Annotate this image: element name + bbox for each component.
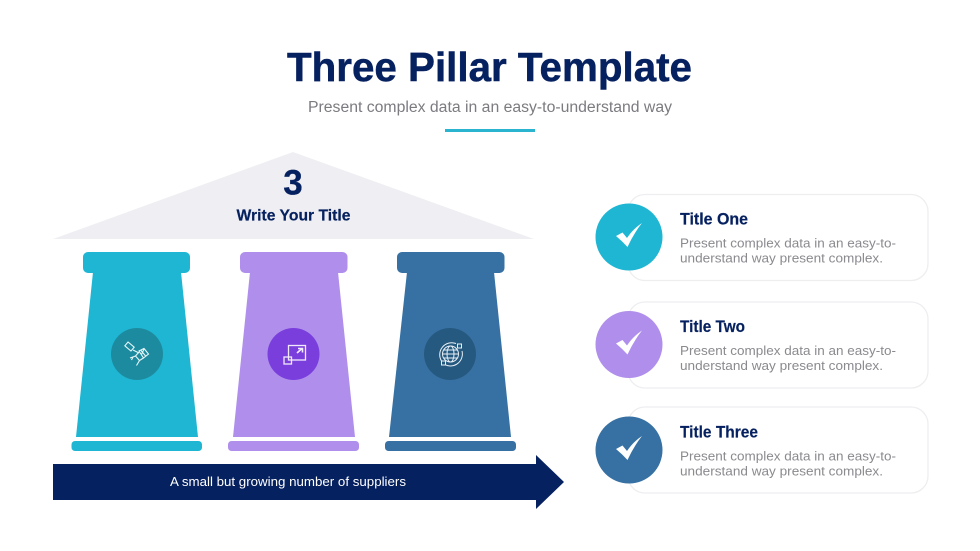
roof number: 3: [283, 164, 303, 202]
title underline accent: [445, 129, 535, 132]
pillar: teal: [72, 252, 202, 451]
icon: check badge purple: [596, 311, 662, 378]
card: title two: [596, 302, 928, 388]
card: title three: [596, 407, 928, 493]
card: title one: [596, 194, 928, 280]
icon: hand holding brush: [125, 342, 148, 366]
subtitle: Present complex data in an easy-to-understand way: [308, 99, 672, 116]
title: Three Pillar Template: [287, 44, 692, 90]
card heading: Title One: [680, 210, 748, 228]
icon: check badge teal: [596, 204, 662, 270]
arrow banner: [53, 455, 564, 509]
icon: check badge blue: [596, 416, 662, 484]
arrow caption: A small but growing number of suppliers: [170, 474, 406, 489]
card body: Present complex data in an easy-to-: [680, 343, 896, 358]
card body: Present complex data in an easy-to-: [680, 236, 896, 250]
card body: understand way present complex.: [680, 464, 883, 478]
pillar: purple: [228, 252, 359, 451]
pillar: blue: [385, 252, 516, 451]
card heading: Title Two: [680, 318, 745, 336]
card body: [680, 236, 896, 266]
card heading: Title Three: [680, 424, 758, 442]
card body: understand way present complex.: [680, 358, 883, 373]
card body: [680, 343, 896, 373]
card body: understand way present complex.: [680, 250, 883, 266]
card body: [680, 448, 896, 478]
card body: Present complex data in an easy-to-: [680, 448, 896, 464]
icon: globe: [440, 343, 462, 366]
icon: expand window: [284, 346, 306, 364]
roof: [53, 152, 534, 239]
roof heading: Write Your Title: [236, 208, 351, 224]
